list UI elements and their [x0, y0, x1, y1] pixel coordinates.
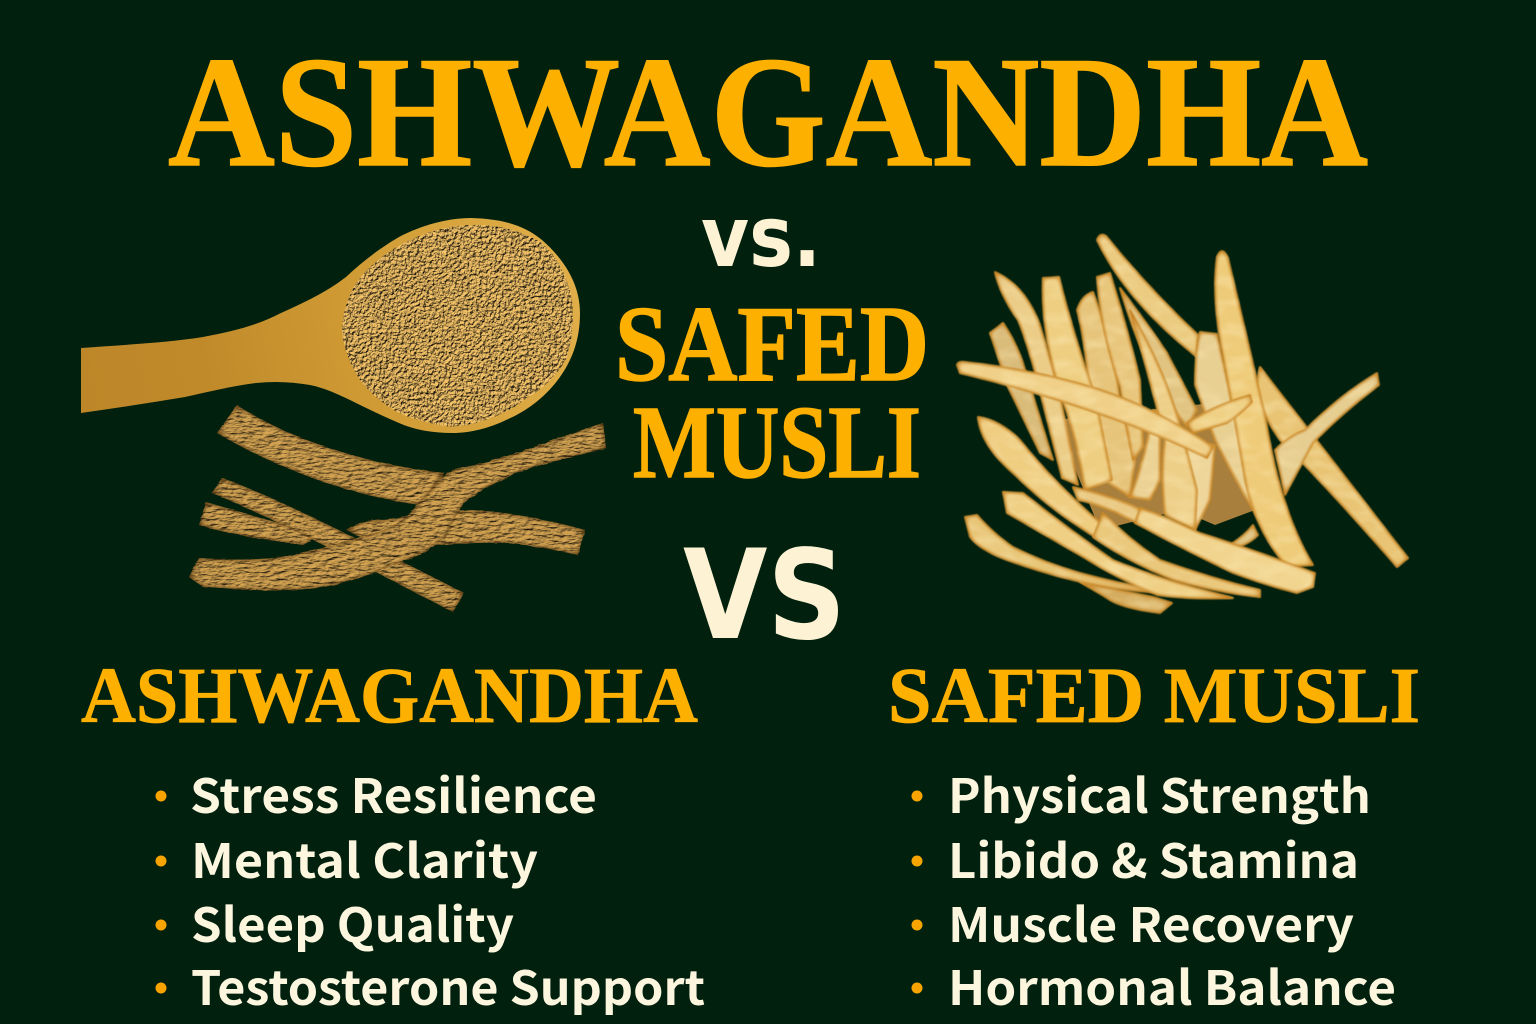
- subtitle: Safed Musli: MUSLI: [633, 385, 921, 500]
- list: safed musli benefits: Physical Strength: [948, 758, 1371, 827]
- title: ASHWAGANDHA: [168, 25, 1368, 200]
- panel: safed musli benefits: [888, 653, 1420, 1019]
- list: safed musli benefits: [912, 758, 1396, 1019]
- list: safed musli benefits: Hormonal Balance: [948, 950, 1396, 1019]
- list: ashwagandha benefits: Sleep Quality: [191, 887, 514, 956]
- image: safed musli root pile: [957, 235, 1408, 613]
- panel: ashwagandha benefits: [81, 653, 705, 1019]
- list: ashwagandha benefits: Stress Resilience: [190, 758, 597, 827]
- list: safed musli benefits: Muscle Recovery: [948, 887, 1354, 956]
- subtitle: Safed Musli: SAFED: [615, 285, 929, 404]
- VS divider label: VS: [683, 524, 846, 668]
- vs. small label: vs.: [701, 188, 821, 286]
- list: safed musli benefits: Libido & Stamina: [948, 823, 1359, 892]
- image: wooden spoon with ashwagandha powder: [81, 218, 580, 433]
- heading: safed musli: SAFED MUSLI: [888, 653, 1420, 740]
- heading: ashwagandha: ASHWAGANDHA: [81, 653, 698, 740]
- list: ashwagandha benefits: [156, 758, 705, 1019]
- list: ashwagandha benefits: Testosterone Support: [191, 950, 705, 1019]
- image: ashwagandha roots: [189, 405, 606, 612]
- list: ashwagandha benefits: Mental Clarity: [191, 823, 538, 892]
- subtitle: Safed Musli: [615, 285, 929, 500]
